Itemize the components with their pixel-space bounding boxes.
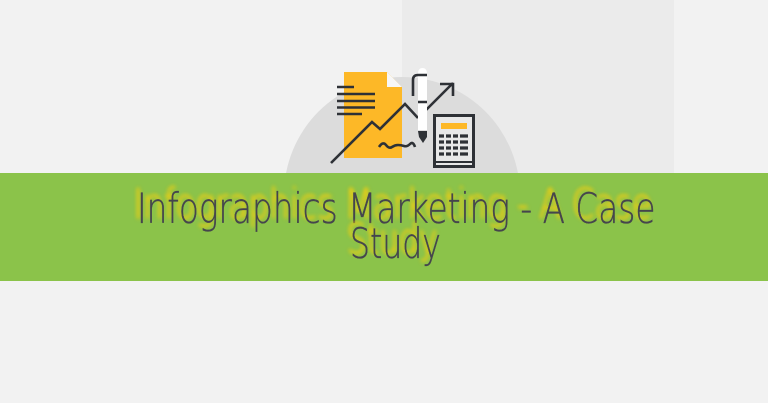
grey circle backdrop [284,77,520,313]
title line 1: Infographics Marketing - A Case [137,184,655,233]
icon: pen [413,68,427,143]
icon: yellow document [337,72,402,158]
illustration: marketing documents and calculator [286,68,518,173]
title line 2: Study [350,219,441,268]
icon: rising chart arrow [331,83,453,163]
icon: signature squiggle [379,143,415,148]
title banner [0,173,768,281]
icon: calculator [434,116,474,166]
light background panel [402,0,674,173]
